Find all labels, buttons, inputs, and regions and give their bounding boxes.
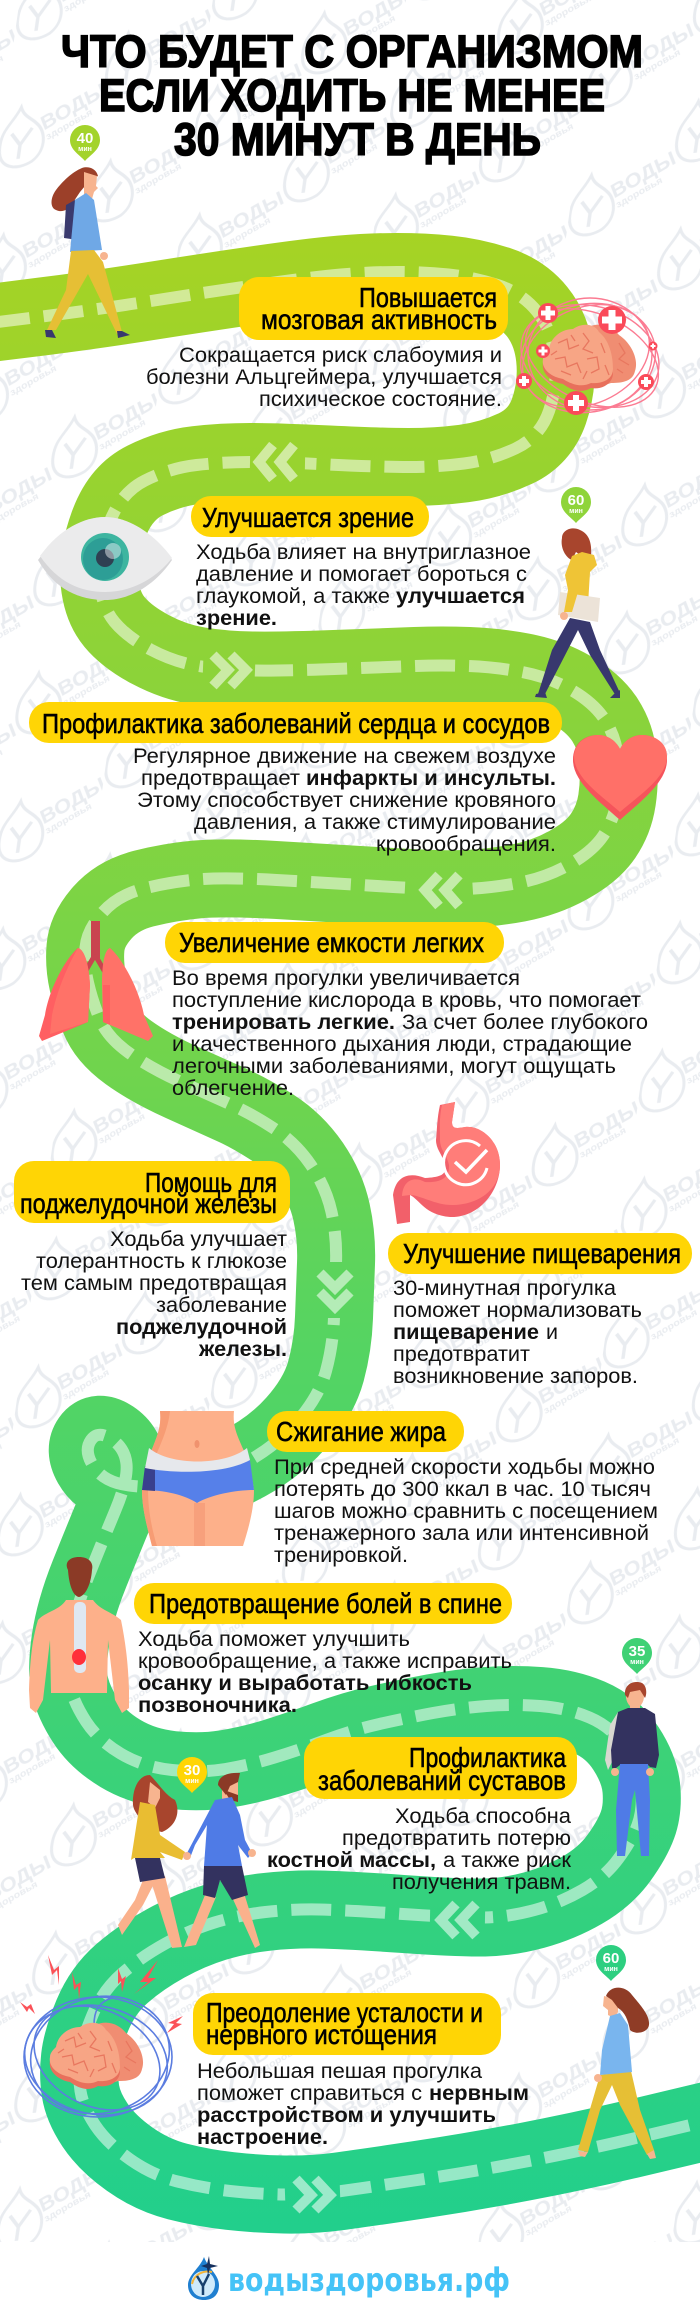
body text: тренировать легкие. [172, 1011, 395, 1034]
body text: улучшается [396, 585, 525, 608]
panel: vision [191, 496, 531, 630]
body text: 30-минутная прогулка [393, 1277, 616, 1300]
badge: 60 min [561, 487, 591, 523]
man with backpack [605, 1682, 659, 1856]
heading text: Увеличение емкости легких [179, 927, 484, 958]
heading text: Улучшается зрение [202, 502, 414, 533]
body text: облегчение. [172, 1077, 294, 1100]
badge: 35 min: мин [630, 1659, 644, 1666]
body text: Во время прогулки увеличивается [172, 967, 520, 990]
heading pill [267, 1411, 464, 1452]
body text: кровообращение, а также исправить [138, 1650, 512, 1673]
body text: осанку и выработать гибкость [138, 1672, 472, 1695]
heading text: Повышается [359, 282, 497, 313]
badge: 30 min: мин [185, 1778, 199, 1785]
body text: предотвращает [141, 767, 300, 790]
body text: тем самым предотвращая [21, 1272, 287, 1295]
icon: lungs [39, 921, 153, 1041]
body text [172, 967, 648, 1100]
body text [146, 344, 502, 411]
body text: зрение. [196, 607, 277, 630]
body text: позвоночника. [138, 1694, 297, 1717]
title: ЕСЛИ ХОДИТЬ НЕ МЕНЕЕ [99, 70, 605, 121]
body text: тренажерного зала или интенсивной [274, 1522, 649, 1545]
icon: stomach [393, 1102, 500, 1224]
panel: brain activity [146, 277, 508, 411]
heading text [318, 1742, 566, 1796]
heading text: нервного истощения [206, 2019, 437, 2050]
direction chevrons [213, 445, 476, 2210]
heading pill [239, 277, 508, 340]
badge: 60 min: 60 [568, 492, 584, 509]
body text: болезни Альцгеймера, улучшается [146, 366, 502, 389]
heading text [20, 1167, 277, 1219]
heading pill [388, 1233, 692, 1274]
body text: Ходьба поможет улучшить [138, 1628, 410, 1651]
body text [197, 2060, 529, 2149]
title: 30 МИНУТ В ДЕНЬ [174, 114, 541, 165]
site name: водыздоровья.рф [228, 2261, 510, 2299]
panel: lung capacity [165, 922, 648, 1100]
body text: инфаркты и инсульты. [306, 767, 556, 790]
body text: Ходьба влияет на внутриглазное [196, 541, 531, 564]
panel: back pain [134, 1583, 512, 1717]
panel: pancreas [14, 1161, 290, 1361]
body text: пищеварение [393, 1321, 539, 1344]
badge: 40 min [70, 125, 100, 161]
body text: При средней скорости ходьбы можно [274, 1456, 655, 1479]
body text: поджелудочной [116, 1316, 287, 1339]
body text [196, 541, 531, 630]
panel: heart and vessels [29, 702, 562, 856]
body text: кровообращения. [376, 833, 556, 856]
body text: психическое состояние. [259, 388, 502, 411]
body text: толерантность к глюкозе [36, 1250, 287, 1273]
chevron covers [203, 462, 485, 2194]
body text: расстройством и улучшить [197, 2104, 496, 2127]
heading pill [29, 702, 562, 743]
heading text: Помощь для [145, 1167, 277, 1198]
body text [138, 1628, 512, 1717]
body text: Этому способствует снижение кровяного [137, 789, 556, 812]
body text: Ходьба способна [395, 1805, 571, 1828]
icon: stressed brain [14, 1955, 183, 2130]
body text: Небольшая пешая прогулка [197, 2060, 482, 2083]
heading text: мозговая активность [261, 304, 497, 335]
walking woman with backpack [45, 167, 130, 338]
heading text: Профилактика заболеваний сердца и сосудов [42, 708, 550, 739]
badge: 30 min: 30 [184, 1762, 200, 1779]
heading pill [193, 1993, 501, 2055]
heading pill [165, 922, 504, 963]
body text: глаукомой, а также [196, 585, 390, 608]
heading pill [304, 1737, 577, 1799]
body text: шагов можно сравнить с посещением [274, 1500, 658, 1523]
panel: fat burning [267, 1411, 658, 1567]
heading text: Предотвращение болей в спине [149, 1588, 502, 1619]
body text: потерять до 300 ккал в час. 10 тысяч [274, 1478, 651, 1501]
icon: heart [573, 735, 667, 820]
walking woman in blue [578, 1988, 656, 2159]
badge: 35 min [622, 1638, 652, 1674]
badge: 30 min [177, 1757, 207, 1793]
panel: fatigue [193, 1993, 529, 2149]
heading text: заболеваний суставов [318, 1765, 566, 1796]
body text: давления, а также стимулирование [194, 811, 556, 834]
body text: а также риск [443, 1849, 572, 1872]
body text: Сокращается риск слабоумия и [179, 344, 502, 367]
heading text: Сжигание жира [276, 1416, 446, 1447]
body text: костной массы, [267, 1849, 436, 1872]
body text: и качественного дыхания люди, страдающие [172, 1033, 632, 1056]
body text [393, 1277, 642, 1388]
body text: давление и помогает бороться с [196, 563, 527, 586]
body text: поможет нормализовать [393, 1299, 642, 1322]
badge: 35 min: 35 [629, 1643, 645, 1660]
man [183, 1773, 260, 1948]
badge: 60 min: мин [569, 508, 583, 515]
body text: Ходьба улучшает [110, 1228, 287, 1251]
heading text: Преодоление усталости и [206, 1997, 483, 2028]
badge: 60 min: 60 [603, 1950, 619, 1967]
heading pill [191, 496, 429, 537]
body text: возникновение запоров. [393, 1365, 638, 1388]
heading pill [134, 1583, 512, 1624]
body text: железы. [198, 1338, 287, 1361]
heading text [261, 282, 497, 335]
body text: Регулярное движение на свежем воздухе [133, 745, 556, 768]
body text: поможет справиться с [197, 2082, 422, 2105]
badge: 40 min: мин [78, 146, 92, 153]
heading text [206, 1997, 483, 2050]
icon: man's back with spine [29, 1557, 129, 1713]
heading text: поджелудочной железы [20, 1188, 277, 1219]
body text [267, 1805, 572, 1894]
body text: нервным [429, 2082, 529, 2105]
panel: joints [267, 1737, 577, 1894]
body text: поступление кислорода в кровь, что помогает [172, 989, 641, 1012]
heading text: Профилактика [409, 1742, 566, 1773]
footer logo [188, 2256, 510, 2300]
body text: предотвратит [393, 1343, 530, 1366]
icon: water drop [188, 2256, 219, 2300]
icon: hips [142, 1411, 254, 1546]
body text [21, 1228, 287, 1361]
body text: настроение. [197, 2126, 328, 2149]
panel: digestion [388, 1233, 692, 1388]
badge: 60 min: мин [604, 1966, 618, 1973]
badge: 40 min: 40 [77, 130, 93, 147]
woman in yellow hoodie [535, 528, 620, 698]
body text [274, 1456, 658, 1567]
icon: eye [38, 517, 172, 600]
icon: healthy brain [506, 285, 674, 427]
title [61, 26, 643, 165]
title: ЧТО БУДЕТ С ОРГАНИЗМОМ [61, 26, 643, 77]
walking couple [118, 1773, 260, 1948]
body text: предотвратить потерю [342, 1827, 571, 1850]
woman [118, 1775, 185, 1948]
body text: и [546, 1321, 558, 1344]
body text: получения травм. [392, 1871, 571, 1894]
body text: За счет более глубокого [402, 1011, 648, 1034]
body text: легочными заболеваниями, могут ощущать [172, 1055, 616, 1078]
body text [133, 745, 556, 856]
heading pill [14, 1161, 290, 1223]
badge: 60 min [596, 1945, 626, 1981]
body text: заболевание [156, 1294, 287, 1317]
body text: тренировкой. [274, 1544, 408, 1567]
